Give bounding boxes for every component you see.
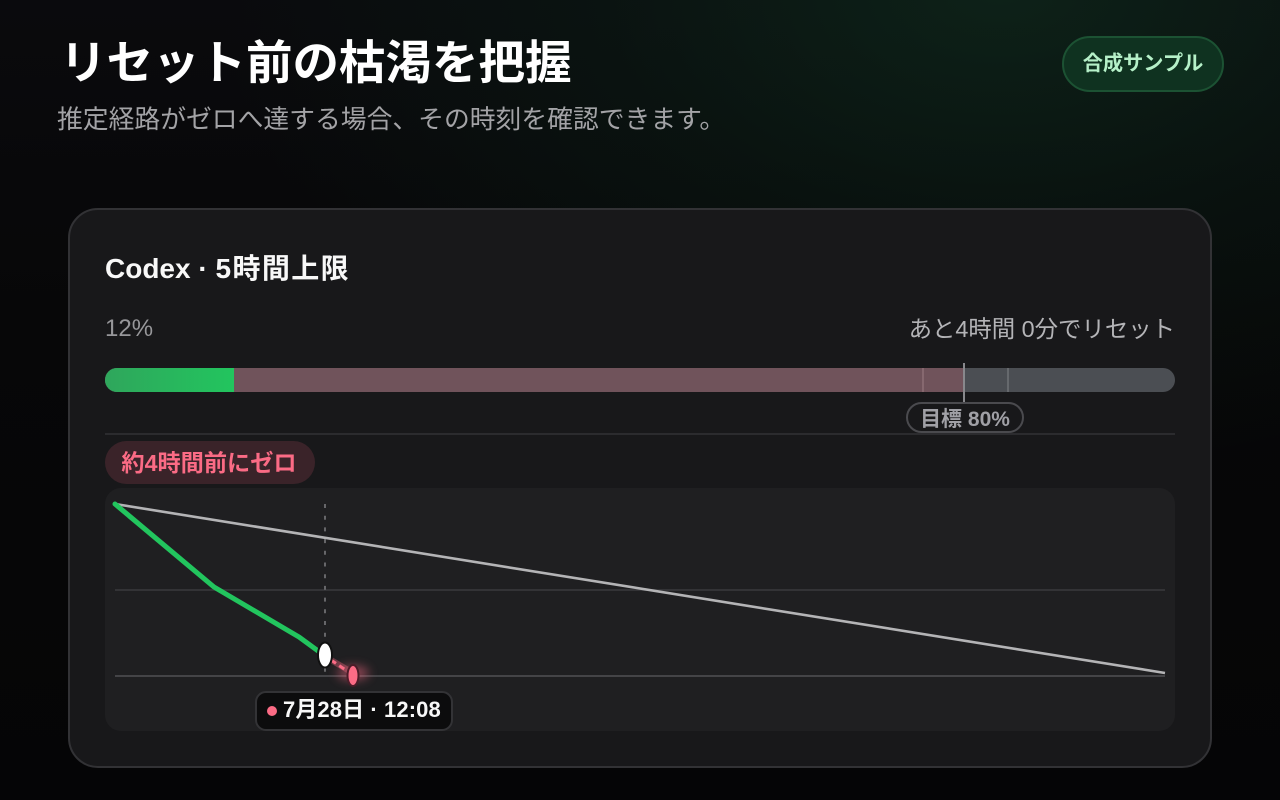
bar track bbox=[105, 368, 1175, 392]
chart bbox=[105, 488, 1175, 731]
tooltip dot bbox=[267, 706, 277, 716]
reset time: あと4時間 0分でリセット bbox=[909, 316, 1175, 342]
badge: synthetic sample: 合成サンプル bbox=[1083, 53, 1203, 75]
panel heading: Codex · 5時間上限 bbox=[105, 253, 350, 284]
budget line bbox=[115, 504, 1165, 673]
badge: synthetic sample bbox=[1062, 36, 1224, 92]
tooltip text: 7月28日 · 12:08 bbox=[283, 697, 441, 722]
target label bbox=[906, 402, 1024, 433]
subtitle: 推定経路がゼロへ達する場合、その時刻を確認できます。 bbox=[57, 106, 725, 134]
target label: 目標 80% bbox=[920, 408, 1010, 431]
progress bar bbox=[105, 363, 1175, 402]
usage percent: 12% bbox=[105, 315, 153, 342]
warning pill bbox=[105, 441, 315, 484]
warning pill: 約4時間前にゼロ bbox=[121, 450, 297, 476]
depletion point bbox=[348, 665, 358, 686]
tooltip: depletion time bbox=[255, 691, 453, 731]
grid line bbox=[115, 589, 1165, 591]
divider bbox=[105, 433, 1175, 435]
now marker line bbox=[324, 504, 326, 676]
current point bbox=[318, 642, 332, 668]
target marker bbox=[963, 363, 965, 402]
title: リセット前の枯渇を把握 bbox=[60, 37, 572, 89]
zero line bbox=[115, 675, 1165, 677]
panel: Codex 5 hour limit bbox=[68, 208, 1212, 768]
usage line bbox=[115, 504, 325, 656]
projection bbox=[331, 660, 369, 680]
